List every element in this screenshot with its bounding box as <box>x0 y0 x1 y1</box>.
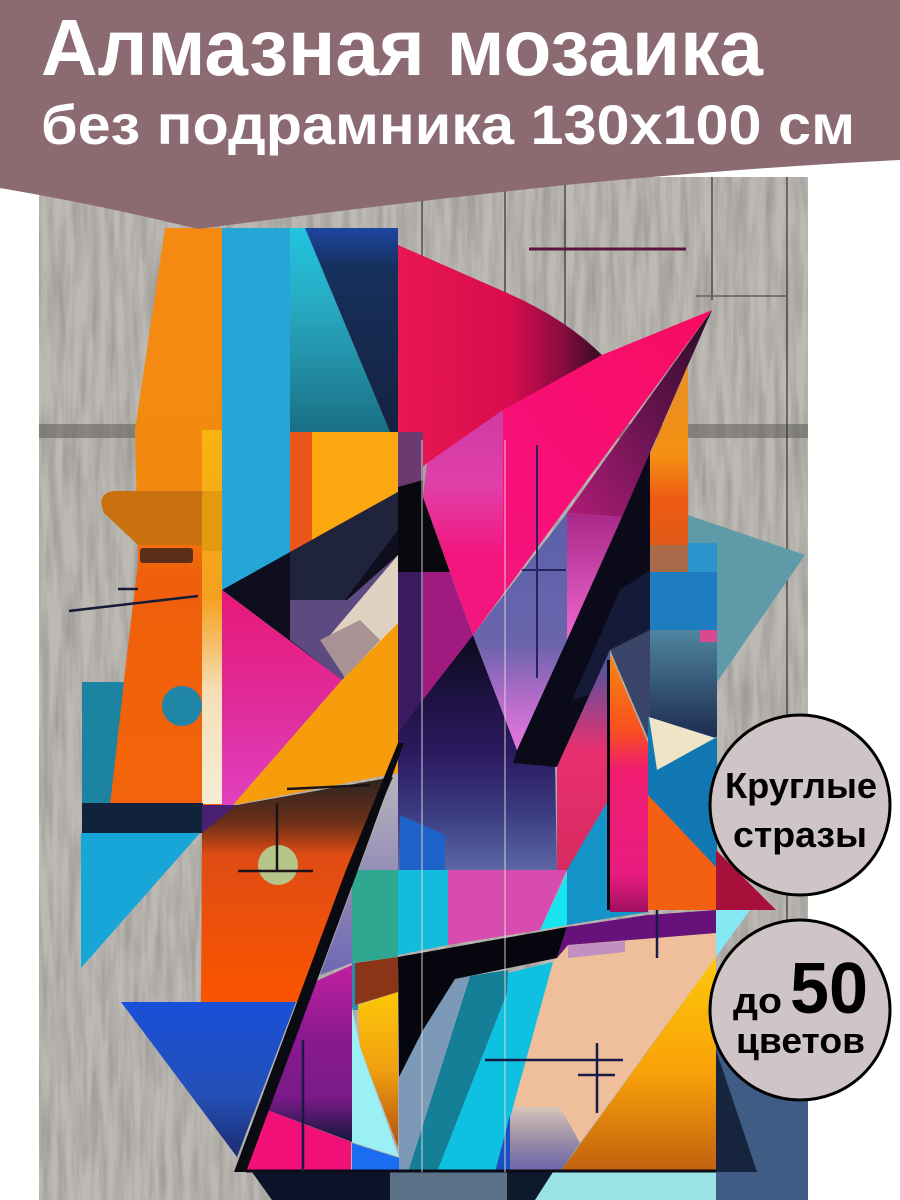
black vertical line <box>607 660 610 910</box>
orange pink strip <box>610 653 648 912</box>
orange strip right <box>650 365 688 545</box>
badge: round rhinestones: Круглые <box>725 765 877 806</box>
grey purple facet <box>290 555 398 680</box>
cyan triangle lower left <box>81 833 200 968</box>
magenta triangle <box>222 590 342 805</box>
black triangle <box>398 480 450 572</box>
dark band <box>398 927 567 1077</box>
teal band <box>408 970 508 1172</box>
thin navy lines left <box>69 589 198 611</box>
black diagonal line <box>234 743 404 1172</box>
badge: round rhinestones <box>710 715 890 895</box>
slate square <box>650 630 717 737</box>
pink red column <box>557 650 610 870</box>
peach panel <box>513 933 716 1143</box>
blue triangle bottom left <box>121 1002 296 1157</box>
magenta shading on dart <box>423 410 503 560</box>
blue grey panel beside black line <box>320 775 398 975</box>
cross lines bottom <box>303 910 657 1172</box>
badge: up to 50 colours: до <box>733 980 782 1021</box>
grey spray <box>510 1107 580 1172</box>
cyan panel lower <box>398 870 448 955</box>
cyan triangle center <box>540 873 567 930</box>
badge: up to 50 colours: 50 <box>790 949 868 1029</box>
teal panel <box>290 228 390 432</box>
blue panel right <box>648 717 717 885</box>
cyan diagonal panel <box>437 962 553 1172</box>
orange yellow triangle <box>233 623 398 805</box>
orange triangle right <box>648 795 716 910</box>
yellow strip <box>202 430 222 804</box>
blue lavender facet <box>473 513 567 750</box>
badge: up to 50 colours: цветов <box>736 1020 865 1061</box>
orange column <box>109 228 222 805</box>
blue column <box>222 228 290 590</box>
green circle with cross <box>238 785 370 885</box>
dark magenta shading <box>567 310 712 517</box>
brown orange facet <box>355 957 398 1005</box>
center dark purple block <box>398 635 557 870</box>
large pink dart <box>423 310 712 635</box>
pink panel lower <box>448 870 567 945</box>
right dark dart <box>513 310 712 767</box>
badge: round rhinestones: стразы <box>733 814 867 855</box>
dark triangle <box>222 492 398 680</box>
purple facet <box>259 965 352 1142</box>
blue square <box>650 543 717 630</box>
white vertical lines <box>422 440 505 1172</box>
yellow panel <box>290 432 398 552</box>
yellow facet <box>358 992 398 1147</box>
cream triangle <box>649 717 715 770</box>
title: Алмазная мозаика <box>41 3 763 92</box>
light cyan corner <box>716 910 750 957</box>
orange yellow triangle bottom <box>560 957 716 1172</box>
badge: up to 50 colours <box>710 920 890 1100</box>
blue small facet <box>352 1143 399 1172</box>
right lower blue wall <box>716 1040 808 1200</box>
light cyan facet <box>352 1007 399 1157</box>
subtitle: без подрамника 130х100 см <box>41 93 855 156</box>
painting on concrete wall <box>39 177 808 1200</box>
pink facet bottom <box>246 1107 351 1172</box>
header banner <box>0 0 900 229</box>
dark shadow band <box>82 803 203 833</box>
grey blue panel <box>399 976 470 1172</box>
cyan sliver <box>352 963 358 1010</box>
upper left center facet <box>398 432 423 490</box>
orange hat shape <box>101 491 220 545</box>
red orange block <box>201 777 393 1002</box>
concrete wall background <box>39 177 808 1200</box>
blue panel center lower <box>567 797 648 925</box>
cross lines center <box>522 445 566 678</box>
crimson wedge <box>398 245 602 490</box>
navy panel <box>305 228 398 432</box>
crimson small triangle <box>716 850 776 910</box>
teal square <box>82 682 124 805</box>
teal circle <box>162 686 202 726</box>
right teal triangle <box>650 500 805 682</box>
pink right facet <box>567 513 622 640</box>
bottom strip under painting <box>252 1172 716 1200</box>
teal panel lower <box>352 870 398 963</box>
navy triangle bottom right <box>716 1050 757 1172</box>
purple line top right <box>529 248 686 250</box>
center magenta <box>423 572 473 700</box>
purple band <box>557 910 716 958</box>
